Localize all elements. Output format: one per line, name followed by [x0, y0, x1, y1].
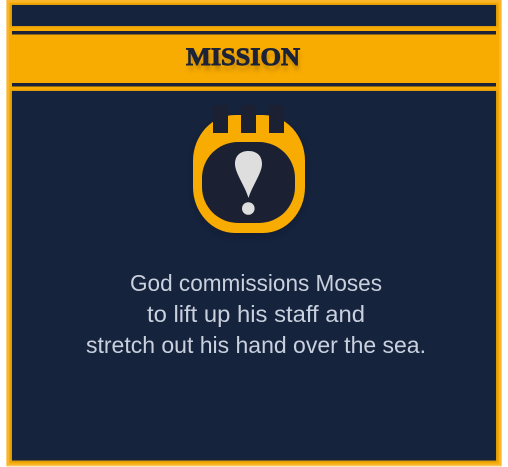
title band [12, 31, 496, 86]
main navy panel [11, 90, 497, 462]
title: MISSION [186, 44, 300, 71]
mission text: to lift up his staff and [147, 301, 365, 327]
title shadow: MISSION [188, 49, 301, 76]
icon: exclamation mark [235, 151, 262, 215]
icon binder tabs [213, 105, 284, 133]
mission text [86, 270, 426, 358]
mission text: stretch out his hand over the sea. [86, 332, 426, 358]
icon: calendar alert [193, 105, 305, 236]
icon shadow [193, 118, 305, 236]
icon inner face [202, 142, 295, 223]
mission text: God commissions Moses [130, 270, 382, 296]
top navy panel [11, 4, 497, 26]
icon body [193, 115, 305, 233]
